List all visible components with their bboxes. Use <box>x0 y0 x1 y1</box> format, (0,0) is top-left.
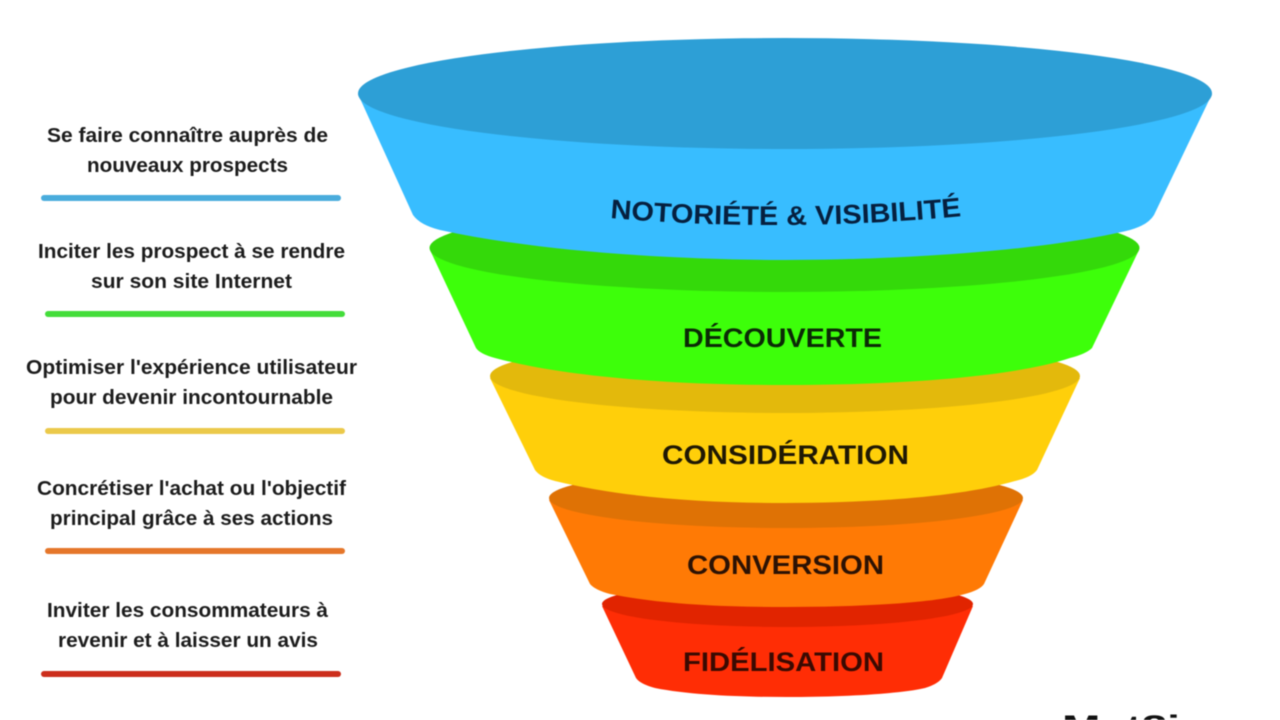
objective 1: Se faire connaître auprès de <box>47 125 328 147</box>
objective 2 <box>38 241 345 317</box>
objective 4: Concrétiser l'achat ou l'objectif <box>37 478 346 500</box>
objective 5 <box>41 600 341 677</box>
objective 3: pour devenir incontournable <box>50 387 333 409</box>
panel: objectives list <box>26 125 357 677</box>
objective 2: sur son site Internet <box>91 271 292 293</box>
objective 5: Inviter les consommateurs à <box>47 600 329 622</box>
objective 1: nouveaux prospects <box>87 155 288 177</box>
objective 3 <box>26 357 357 434</box>
funnel tier: découverte <box>430 204 1140 385</box>
funnel tier: considération <box>490 339 1080 503</box>
funnel tier: conversion <box>549 468 1023 607</box>
funnel tier: considération: CONSIDÉRATION <box>662 439 909 470</box>
panel: funnel <box>357 37 1213 698</box>
funnel tier: fidélisation <box>602 581 973 697</box>
objective 4 <box>37 478 346 554</box>
funnel tier: notoriété et visibilité: NOTORIÉTÉ & VISIBILITÉ <box>611 192 961 226</box>
funnel tier: conversion: CONVERSION <box>687 550 884 580</box>
objective 4: principal grâce à ses actions <box>50 508 333 530</box>
objective 3: Optimiser l'expérience utilisateur <box>26 357 357 379</box>
objective 5: revenir et à laisser un avis <box>58 630 318 652</box>
funnel tier: découverte: DÉCOUVERTE <box>683 322 882 353</box>
objective 2: Inciter les prospect à se rendre <box>38 241 345 263</box>
objective 1 <box>41 125 341 201</box>
funnel tier: notoriété et visibilité <box>357 37 1213 261</box>
funnel tier: fidélisation: FIDÉLISATION <box>683 646 884 677</box>
